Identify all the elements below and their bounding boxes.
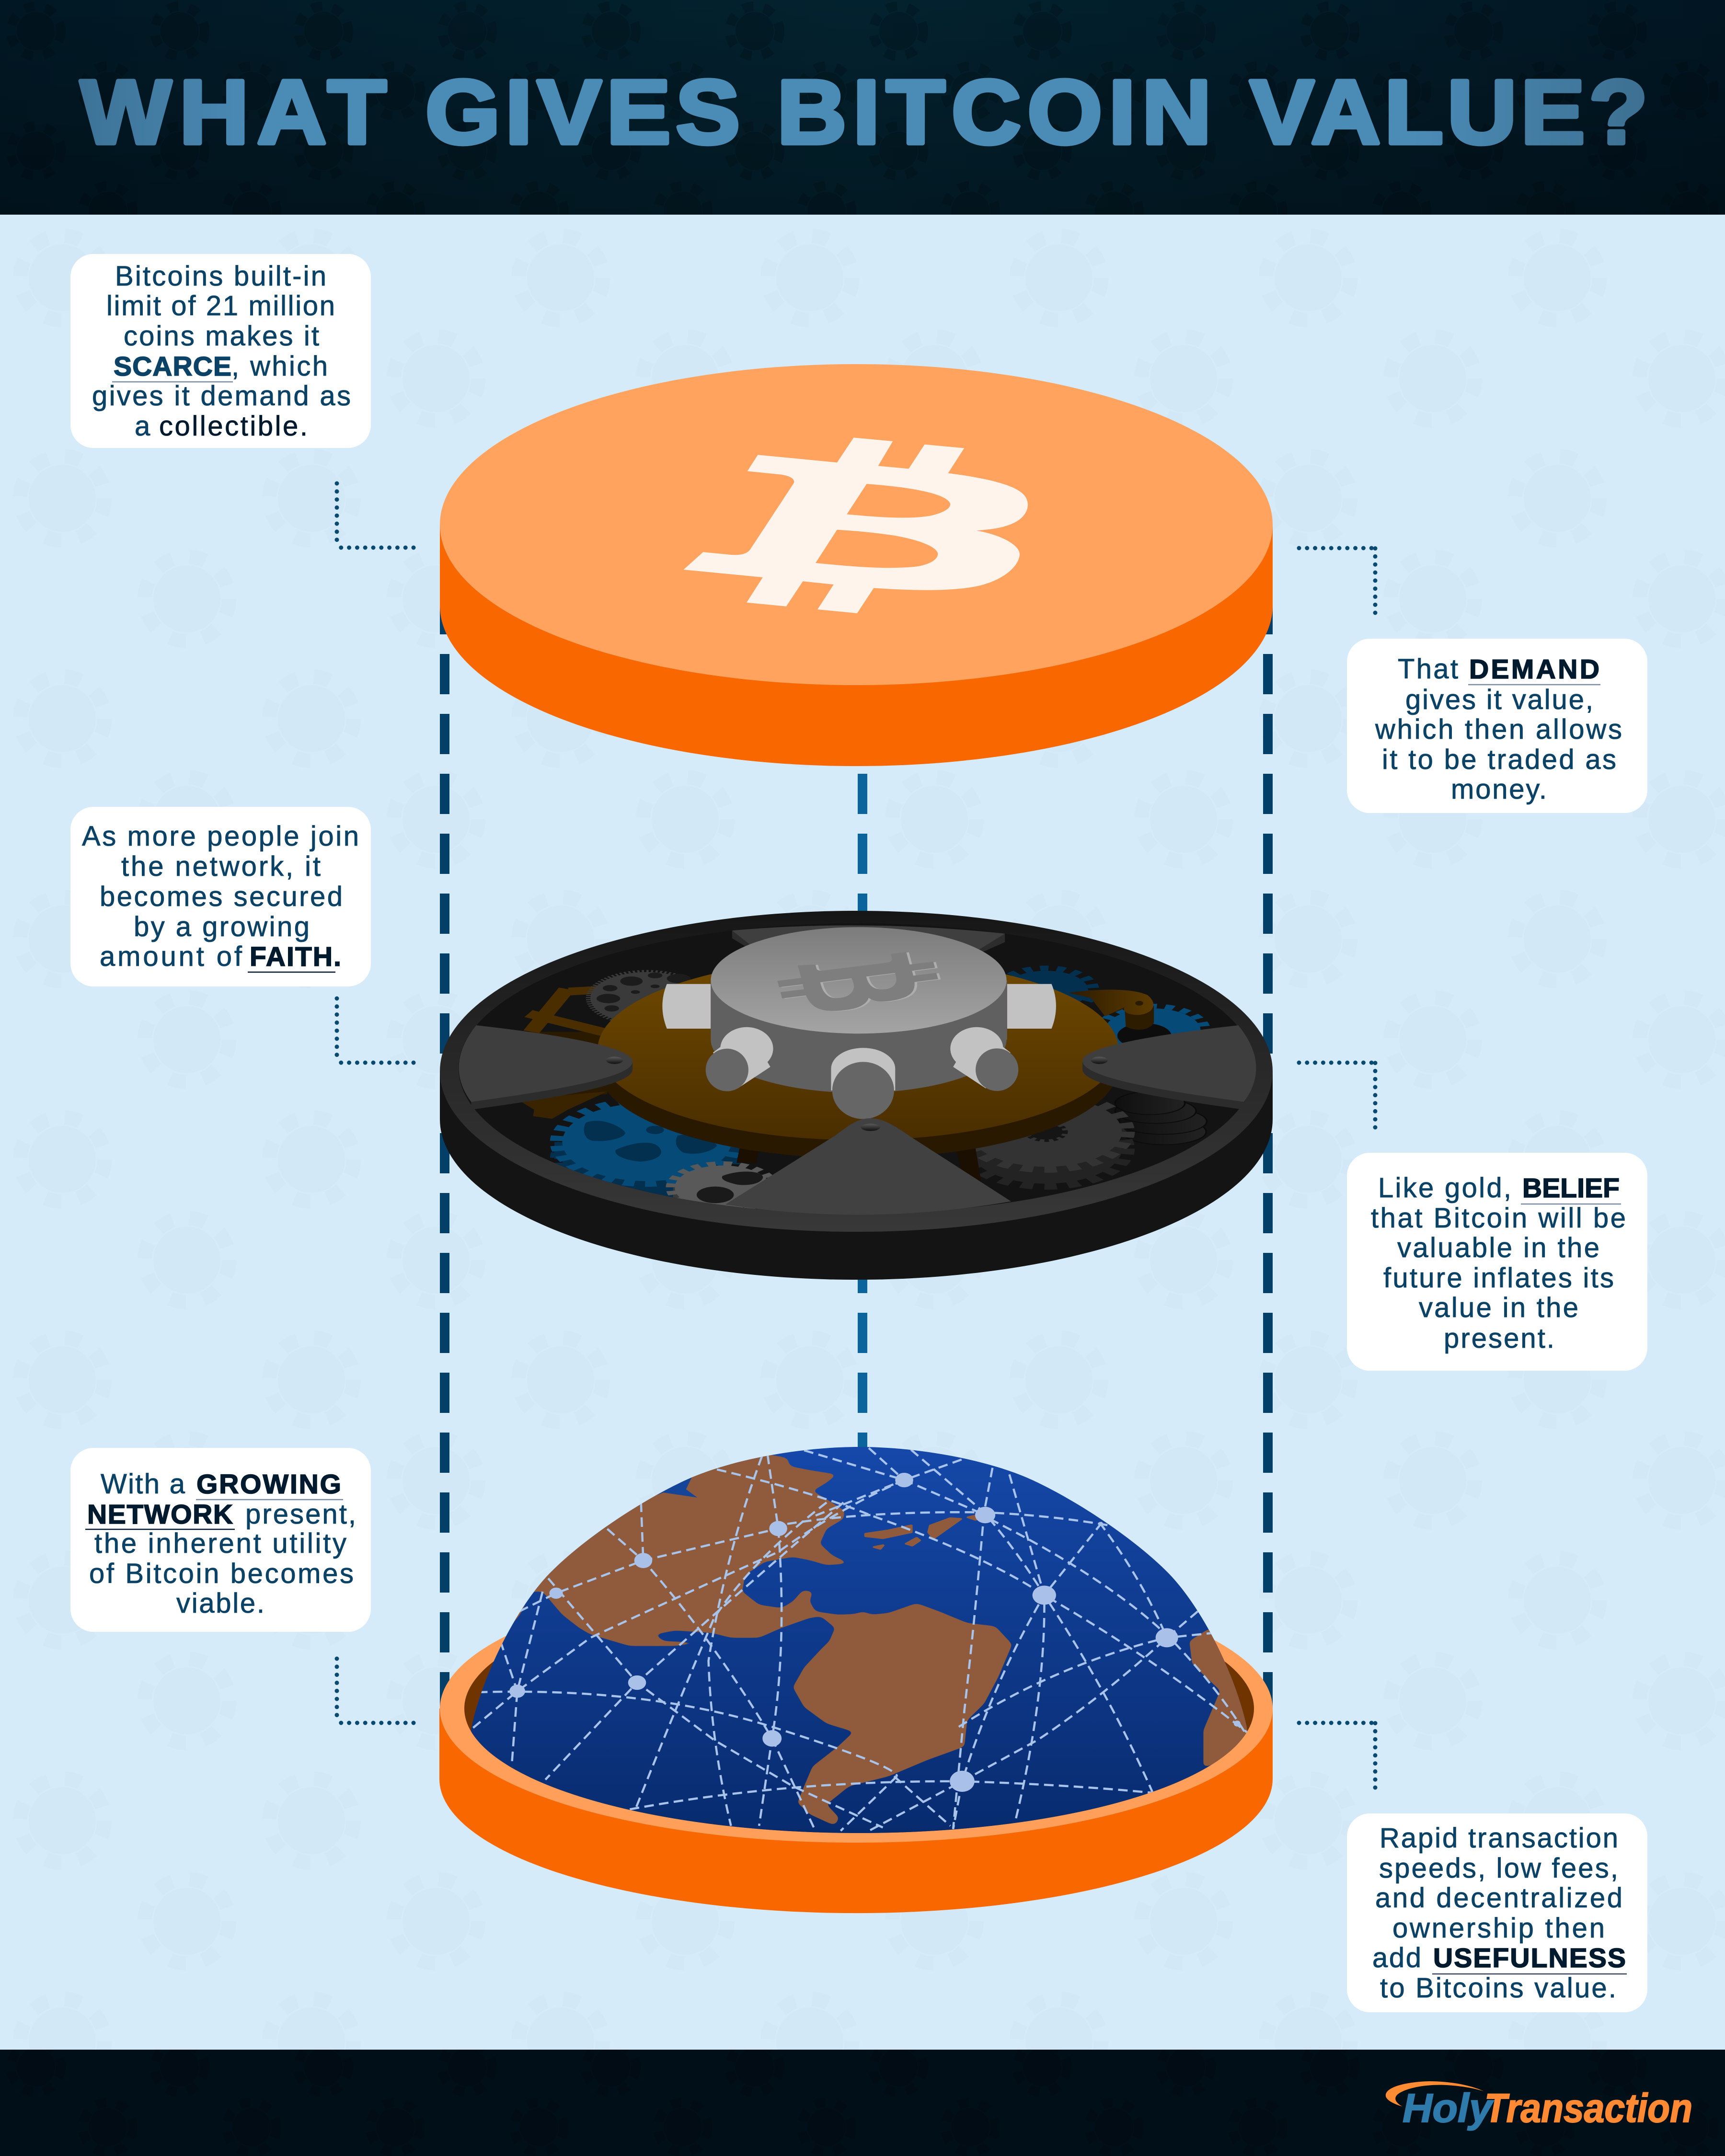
- callout: demand: money.: [1451, 774, 1547, 805]
- globe ocean: [431, 1437, 1294, 1869]
- casing interior: [459, 923, 1255, 1214]
- left front pin: [706, 1027, 773, 1091]
- blue gear lower left: [554, 1101, 740, 1201]
- callout: growing network: present,: [245, 1499, 356, 1530]
- callout: growing network: [70, 1448, 371, 1632]
- callout: demand: which then allows: [1375, 714, 1622, 745]
- callout: faith: by a growing: [134, 911, 310, 942]
- callout: scarcity: Bitcoins built-in: [115, 261, 326, 292]
- callout: demand: it to be traded as: [1382, 744, 1616, 775]
- callout: belief: that Bitcoin will be: [1371, 1203, 1626, 1234]
- callout: belief: Like gold,: [1378, 1172, 1511, 1204]
- callout: usefulness: USEFULNESS: [1433, 1943, 1626, 1973]
- callout: demand: gives it value,: [1405, 684, 1593, 715]
- callout: usefulness: to Bitcoins value.: [1380, 1973, 1616, 2004]
- icon: bitcoin symbol: [684, 437, 1028, 613]
- callout: scarcity: [70, 254, 371, 448]
- dish rim: [440, 1574, 1273, 1843]
- network links: [472, 1448, 1248, 1833]
- callout: demand: [1347, 639, 1647, 813]
- callout: belief: value in the: [1419, 1292, 1578, 1323]
- mechanism wedge plates: [459, 1025, 1256, 1215]
- coin top face: [440, 364, 1273, 685]
- dotted connector: scarcity: [337, 483, 414, 548]
- brown hook lever: [1069, 990, 1154, 1030]
- brown wheel legs: [736, 1148, 981, 1182]
- right blue gear: [1102, 1004, 1210, 1044]
- header banner: [0, 0, 1725, 215]
- network nodes: [509, 1473, 1241, 1792]
- dotted connector: demand: [1299, 548, 1375, 613]
- logo: HolyTransaction: Holy: [1403, 2086, 1494, 2131]
- callout: usefulness: [1347, 1813, 1647, 2012]
- callout: demand: That: [1398, 654, 1458, 685]
- logo: HolyTransaction: Transaction: [1484, 2086, 1692, 2131]
- bottom wedge plate: [725, 1118, 1011, 1215]
- center front pin: [831, 1048, 895, 1119]
- mechanism layer: gears inside a dark casing: [440, 911, 1273, 1280]
- side pistons: [662, 984, 1056, 1029]
- callout: faith: FAITH.: [250, 941, 341, 972]
- right wedge plate: [1082, 1025, 1256, 1110]
- callout: growing network: With a: [101, 1468, 185, 1500]
- right front pin: [950, 1027, 1018, 1091]
- left wedge plate: [459, 1025, 632, 1110]
- callout: scarcity: a: [135, 411, 150, 442]
- grey hub top: [711, 927, 1007, 1033]
- callout: faith: amount of: [100, 941, 242, 972]
- callout: belief: future inflates its: [1383, 1262, 1614, 1294]
- title: VALUE?: [1250, 62, 1648, 163]
- callout: usefulness: ownership then: [1392, 1913, 1605, 1944]
- spoked dark gear: [586, 970, 691, 1021]
- dish interior: [464, 1584, 1254, 1833]
- hudson bay: [635, 1469, 697, 1502]
- callout: growing network: NETWORK: [87, 1499, 233, 1530]
- callout: scarcity: gives it demand as: [92, 380, 351, 412]
- globe dome: [431, 1437, 1294, 1869]
- callout: growing network: GROWING: [196, 1469, 341, 1500]
- callout: usefulness: Rapid transaction: [1380, 1823, 1618, 1854]
- callout: faith: [70, 807, 371, 986]
- grey gear lower: [671, 1164, 774, 1212]
- continents: [478, 1455, 1265, 1826]
- callout: demand: DEMAND: [1469, 654, 1599, 685]
- callout: faith: As more people join: [82, 821, 359, 852]
- title: GIVES: [426, 62, 740, 163]
- dark blue gear behind: [1007, 965, 1099, 1003]
- dotted connector: belief: [1299, 1063, 1375, 1127]
- callout: growing network: the inherent utility: [94, 1528, 346, 1559]
- title: BITCOIN: [777, 62, 1211, 163]
- dark gear lower right: [964, 1094, 1128, 1187]
- grey hub body: [711, 980, 1007, 1093]
- callout: belief: present.: [1444, 1323, 1554, 1354]
- coin side: [440, 525, 1273, 766]
- icon: embossed bitcoin symbol: [760, 938, 958, 1023]
- callout: faith: becomes secured: [100, 881, 343, 912]
- dotted connector: growing network: [337, 1659, 414, 1723]
- dotted connector: faith: [337, 998, 414, 1063]
- brown wheel face: [598, 958, 1118, 1140]
- callout: scarcity: collectible.: [159, 411, 308, 442]
- callout: usefulness: add: [1372, 1942, 1421, 1973]
- callout: usefulness: speeds, low fees,: [1379, 1853, 1618, 1884]
- callout: growing network: viable.: [176, 1588, 264, 1619]
- title: WHAT: [80, 62, 386, 163]
- logo: HolyTransaction: [1386, 2081, 1692, 2131]
- coil spring: [1115, 1092, 1207, 1145]
- brown bitcoin-shaped cog: [522, 986, 608, 1119]
- callout: faith: the network, it: [121, 851, 321, 882]
- dish side: [439, 1709, 1273, 1913]
- callout: usefulness: and decentralized: [1375, 1882, 1622, 1914]
- callout: scarcity: coins makes it: [124, 321, 319, 352]
- callout: belief: valuable in the: [1397, 1232, 1599, 1263]
- casing rim: [440, 911, 1273, 1232]
- logo swoosh: [1386, 2081, 1484, 2107]
- callout: growing network: of Bitcoin becomes: [89, 1558, 354, 1589]
- dotted connector: usefulness: [1299, 1723, 1375, 1788]
- dashed connector lines: [445, 594, 1268, 1792]
- top wedge plate: [732, 925, 1005, 954]
- callout: belief: BELIEF: [1522, 1173, 1620, 1204]
- brown wheel side: [598, 976, 1118, 1158]
- interior mechanism: [506, 925, 1207, 1212]
- callout: belief: [1347, 1153, 1647, 1371]
- callout: scarcity: SCARCE: [114, 351, 231, 382]
- callout: scarcity: limit of 21 million: [106, 290, 335, 321]
- globe layer: network globe in an orange dish: [431, 1437, 1294, 1913]
- title: [80, 62, 1648, 163]
- footer banner: [0, 2050, 1725, 2156]
- bitcoin coin layer: [440, 364, 1273, 766]
- callout: scarcity: , which: [231, 351, 328, 382]
- casing side: [440, 1071, 1273, 1280]
